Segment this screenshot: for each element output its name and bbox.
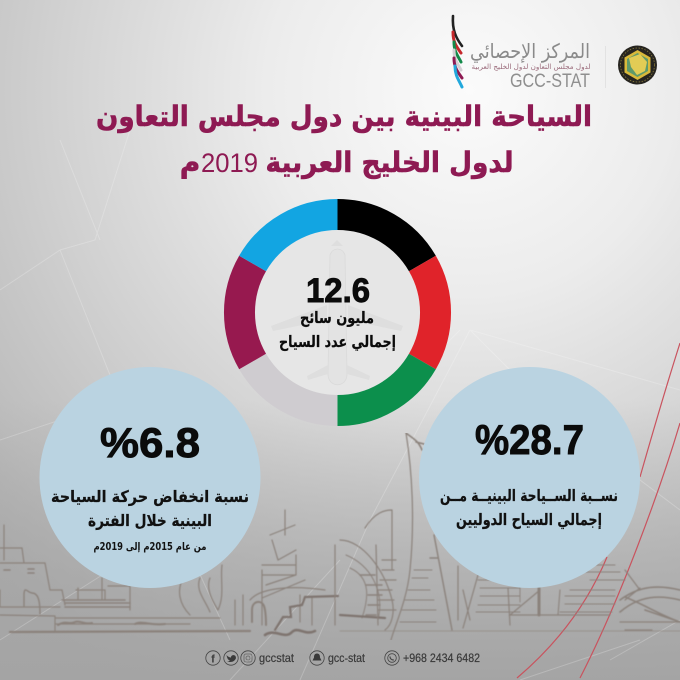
description line 1: نســبة الســياحة البينيــة مــن <box>440 486 618 505</box>
description line 2: البينية خلال الفترة <box>88 511 212 530</box>
donut chart <box>239 214 436 410</box>
segment: maroon <box>239 264 253 362</box>
icon: instagram <box>241 651 255 665</box>
icon: snapchat <box>310 651 324 665</box>
title line 2: 2019 <box>201 148 258 178</box>
icon: plane watermark <box>271 240 403 385</box>
icon: twitter <box>224 651 238 665</box>
description line 2: إجمالي السياح الدوليين <box>456 510 602 530</box>
handle: gcc-stat: gcc-stat <box>328 651 366 665</box>
icon: facebook: f <box>211 654 215 666</box>
inner disc <box>255 230 420 395</box>
logo ribbon <box>453 16 462 87</box>
segment: red <box>422 264 436 362</box>
logo emblem <box>618 46 657 84</box>
red decorative curves <box>517 343 680 678</box>
logo: GCC-STAT <box>453 16 657 92</box>
skyline sketch <box>0 433 680 640</box>
circle <box>40 367 260 588</box>
segment: blue <box>253 214 338 264</box>
logo subtitle: لدول مجلس التعاون لدول الخليج العربية <box>472 63 590 71</box>
segment: green <box>338 362 422 410</box>
logo divider <box>605 46 606 88</box>
total value: 12.6 <box>306 272 370 310</box>
segment: black <box>338 214 422 264</box>
circle <box>419 367 640 588</box>
period note: من عام 2015م إلى 2019م <box>94 541 206 553</box>
panel: decline stat <box>40 367 260 588</box>
unit label: مليون سائح <box>300 309 374 327</box>
segment: grey <box>253 362 338 410</box>
title line 1: السياحة البينية بين دول مجلس التعاون <box>96 100 592 133</box>
logo GCC-STAT wordmark: GCC-STAT <box>510 71 590 92</box>
total label: إجمالي عدد السياح <box>279 333 396 352</box>
handle: gccstat: gccstat <box>259 651 295 665</box>
value: %6.8 <box>100 419 200 466</box>
value: %28.7 <box>475 416 584 463</box>
description line 1: نسبة انخفاض حركة السياحة <box>51 487 249 506</box>
phone number: +968 2434 6482 <box>403 651 480 665</box>
footer <box>206 651 480 666</box>
icon: whatsapp <box>385 651 399 665</box>
logo Arabic name: المركز الإحصائي <box>470 39 590 64</box>
title <box>96 100 592 179</box>
title line 2: لدول الخليج العربية <box>266 146 514 179</box>
icon: facebook <box>206 651 220 666</box>
title line 2: م <box>180 146 200 179</box>
donut centre text <box>279 272 396 352</box>
panel: share stat <box>419 367 640 588</box>
